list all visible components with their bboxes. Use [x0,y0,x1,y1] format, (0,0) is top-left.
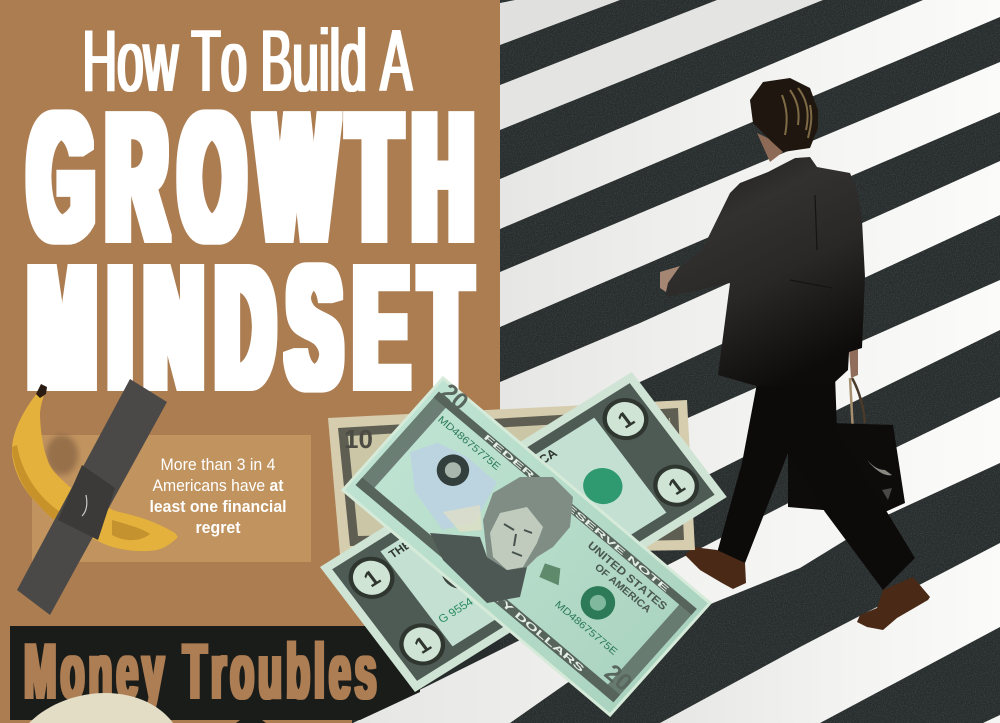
panel: tan title panel [0,0,500,626]
banner heading text: Money Troubles [24,628,377,716]
man: tote bag [788,423,905,512]
bill: one dollar: 1 [663,472,690,500]
callout text: More than 3 in 4 [160,456,276,474]
bill: twenty dollars on top: OF AMERICA [592,562,653,615]
bill: twenty dollars on top: 20 [435,379,473,416]
bill: ten dollars at back: D [660,413,670,429]
bill: one dollar [320,372,727,692]
bill: one dollar: 1 [612,406,639,433]
callout box: financial regret [32,435,311,562]
banner: Money Troubles [0,626,420,723]
bill: twenty dollars on top: FEDERAL RESERVE NOTE [482,433,672,595]
callout text: Americans have at [152,477,284,495]
title line: How To Build A: How To Build A [83,11,413,110]
bill: twenty dollars on top [343,374,714,715]
man: neck [757,133,783,162]
portrait: blond hair [29,693,173,723]
bill: one dollar: THE UNITED [387,515,453,561]
bill: one dollar: 1 [409,631,436,658]
callout text: regret [196,519,241,537]
icon: duct tape strip [17,379,167,615]
panel: crosswalk photo background [340,0,1000,723]
illustration: stack of dollar bills [320,372,727,715]
bill portrait: Jackson [430,477,573,603]
man: bag handles [828,378,865,433]
bill: twenty dollars on top: MD48675775E [552,599,619,658]
callout text [150,456,286,537]
title word: MINDSET: MINDSET [29,230,470,424]
bill: ten dollars at back [328,400,695,555]
man: hand [660,266,680,292]
icon: banana taped to panel [12,379,178,615]
man: right shoe [857,577,930,630]
bill: one dollar: G 95541458 E [436,577,507,626]
bill: ten dollars at back: 10 [344,424,373,454]
man: left shoe [685,547,746,589]
man: suit jacket [665,157,865,387]
title word: GROWTH: GROWTH [29,76,473,278]
man: shirt collar [770,150,812,170]
bill: twenty dollars on top: 20 [599,659,637,697]
man: hand at bag [849,348,858,378]
bill: twenty dollars on top: UNITED STATES [585,540,669,613]
man: trousers [717,375,915,590]
bill: one dollar: 1 [358,564,385,592]
bill: twenty dollars on top: MD48675775E [435,414,502,473]
bill: twenty dollars on top: TWENTY DOLLARS [450,557,587,674]
callout text: least one financial [150,498,286,516]
illustration: businessman walking [660,78,930,630]
bill: one dollar: AMERICA [502,446,560,489]
man: hair [750,78,818,152]
